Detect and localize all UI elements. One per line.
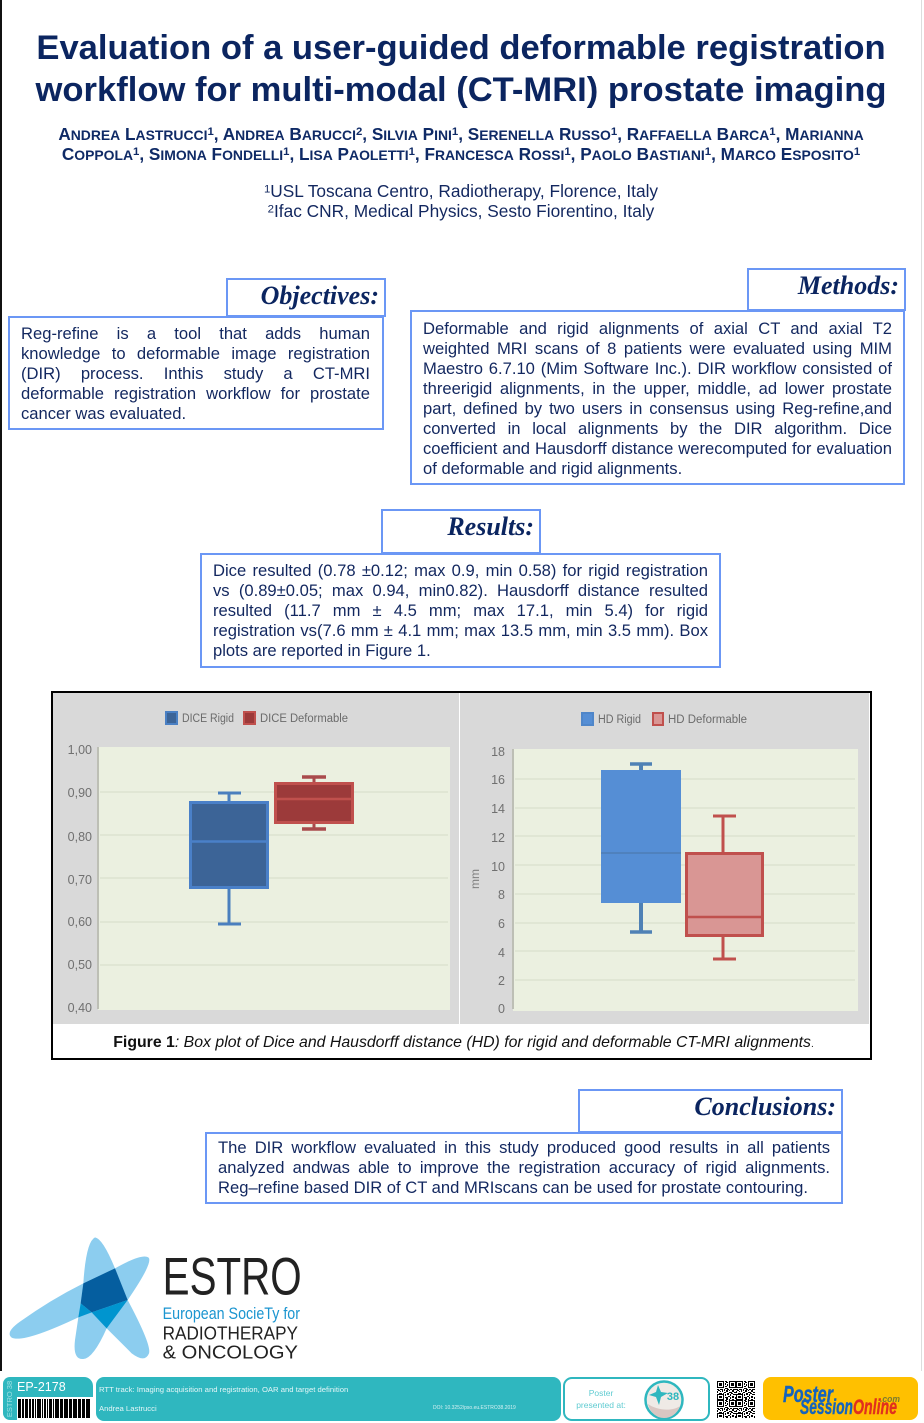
- objectives heading: [226, 278, 386, 317]
- objectives body text: deformable registration workflow for prostate: [21, 384, 370, 403]
- methods heading: Methods:: [798, 271, 899, 300]
- title: Evaluation of a user-guided deformable registration: [36, 29, 886, 67]
- chart: dice box plot: 0,90: [68, 786, 92, 800]
- chart: hausdorff box plot: 0: [498, 1002, 505, 1016]
- affiliations: [264, 181, 658, 221]
- results heading: [381, 509, 541, 554]
- affiliations: 2Ifac CNR, Medical Physics, Sesto Fiorentino, Italy: [268, 201, 654, 221]
- icon: estro 38 badge: [644, 1380, 684, 1419]
- authors: [58, 124, 864, 164]
- poster session online logo: [763, 1377, 918, 1420]
- legend: hd: HD Deformable: [668, 714, 747, 726]
- box: dice rigid: [190, 793, 268, 924]
- box: hd deformable: [686, 816, 762, 959]
- poster session online logo: Poster: [783, 1381, 834, 1407]
- presented at text: Poster: [589, 1388, 613, 1398]
- doi: DOI: 10.3252/pso.eu.ESTRO38.2019: [433, 1405, 516, 1411]
- objectives body text: knowledge to deformable image registration: [21, 344, 370, 363]
- conclusions body text: Reg–refine based DIR of CT and MRIscans can be used for prostate contouring.: [218, 1178, 808, 1197]
- footer: poster id tag: [3, 1377, 93, 1420]
- chart: hausdorff box plot: [460, 693, 869, 1024]
- box: dice deformable: [276, 777, 352, 829]
- chart: hausdorff box plot: 8: [498, 888, 505, 902]
- legend: dice: [166, 712, 348, 725]
- footer: track bar: [96, 1377, 561, 1421]
- methods body text: part, defined by two users in consensus using Reg-refine,and: [423, 399, 892, 418]
- panel: methods: [410, 268, 906, 485]
- logo wordmark: & ONCOLOGY: [163, 1341, 299, 1362]
- barcode: [17, 1397, 93, 1420]
- legend: hd: [582, 713, 747, 726]
- chart: hausdorff box plot: 16: [491, 773, 505, 787]
- chart: hausdorff box plot: 18: [491, 745, 505, 759]
- presented at text: presented at:: [576, 1400, 626, 1410]
- logo wordmark: [163, 1247, 302, 1362]
- logo: estro: [10, 1237, 302, 1362]
- conclusions body text: analyzed andwas able to improve the registration accuracy of rigid alignments.: [218, 1158, 830, 1177]
- figure caption: Figure 1: Box plot of Dice and Hausdorff distance (HD) for rigid and deformable CT-MRI alignments.: [113, 1034, 814, 1051]
- logo wordmark: RADIOTHERAPY: [163, 1323, 299, 1344]
- chart: dice box plot: 1,00: [68, 743, 92, 757]
- figure charts: [53, 693, 869, 1024]
- title: [35, 29, 886, 109]
- poster session online logo: .com: [880, 1394, 900, 1404]
- methods body text: of deformable and rigid alignments.: [423, 459, 682, 478]
- methods body text: threerigid alignments, in the upper, middle, ad lower prostate: [423, 379, 892, 398]
- results body text: vs (0.89±0.05; max 0.94, min0.82). Hausdorff distance resulted: [213, 581, 708, 600]
- results heading: Results:: [447, 512, 534, 541]
- results body text: plots are reported in Figure 1.: [213, 641, 431, 660]
- conclusions heading: [578, 1089, 843, 1133]
- chart: dice box plot: 0,40: [68, 1001, 92, 1015]
- poster number: EP-2178: [17, 1380, 66, 1394]
- methods body text: converted in local alignments by the DIR algorithm. Dice: [423, 419, 892, 438]
- presenter name: Andrea Lastrucci: [99, 1404, 157, 1413]
- chart: hausdorff box plot: 12: [491, 831, 505, 845]
- results body text: Dice resulted (0.78 ±0.12; max 0.9, min 0.58) for rigid registration: [213, 561, 708, 580]
- affiliations: 1USL Toscana Centro, Radiotherapy, Florence, Italy: [264, 181, 658, 201]
- results body text: [200, 553, 721, 668]
- panel: figure 1: [51, 691, 872, 1060]
- legend: hd: HD Rigid: [598, 714, 641, 726]
- panel: conclusions: [205, 1089, 843, 1204]
- chart: dice box plot: 0,80: [68, 830, 92, 844]
- track text: RTT track: Imaging acquisition and registration, OAR and target definition: [99, 1385, 348, 1394]
- poster session online logo: Session: [800, 1396, 853, 1419]
- axis label: mm: mm: [468, 869, 482, 889]
- methods body text: Maestro 6.7.10 (Mim Software Inc.). DIR workflow consisted of: [423, 359, 892, 378]
- legend: dice: DICE Deformable: [260, 713, 348, 725]
- chart: hausdorff box plot: 6: [498, 917, 505, 931]
- methods heading: [747, 268, 906, 311]
- qr code: [717, 1381, 755, 1418]
- results body text: resulted (11.7 mm ± 4.5 mm; max 17.1, min 5.4) for rigid: [213, 601, 708, 620]
- authors: ANDREA LASTRUCCI1, ANDREA BARUCCI2, SILVIA PINI1, SERENELLA RUSSO1, RAFFAELLA BARCA1, MARIANNA: [58, 124, 864, 144]
- methods body text: weighted MRI scans of 8 patients were evaluated using MIM: [423, 339, 892, 358]
- chart: hausdorff box plot: 14: [491, 802, 505, 816]
- chart: hausdorff box plot: 4: [498, 946, 505, 960]
- panel: results: [200, 509, 721, 668]
- methods body text: Deformable and rigid alignments of axial CT and axial T2: [423, 319, 892, 338]
- title: workflow for multi-modal (CT-MRI) prostate imaging: [36, 71, 886, 109]
- icon: estro 38 badge: 38: [667, 1391, 679, 1403]
- objectives body text: (DIR) process. Inthis study a CT-MRI: [21, 364, 370, 383]
- objectives body text: [8, 316, 384, 430]
- box: hd rigid: [601, 764, 681, 932]
- authors: COPPOLA1, SIMONA FONDELLI1, LISA PAOLETTI1, FRANCESCA ROSSI1, PAOLO BASTIANI1, MARCO ESPOSITO1: [62, 144, 860, 164]
- objectives body text: cancer was evaluated.: [21, 404, 186, 423]
- legend: dice: DICE Rigid: [182, 713, 234, 725]
- conclusions body text: The DIR workflow evaluated in this study produced good results in all patients: [218, 1138, 830, 1157]
- chart: dice box plot: [53, 693, 459, 1024]
- objectives heading: Objectives:: [261, 281, 379, 310]
- chart: dice box plot: 0,50: [68, 958, 92, 972]
- conclusions heading: Conclusions:: [694, 1092, 836, 1121]
- panel: objectives: [8, 278, 386, 430]
- logo wordmark: European SocieTy for: [163, 1305, 300, 1323]
- methods body text: coefficient and Hausdorff distance werecomputed for evaluation: [423, 439, 892, 458]
- presented at text: [576, 1388, 626, 1410]
- conclusions body text: [205, 1132, 843, 1204]
- chart: dice box plot: 0,60: [68, 915, 92, 929]
- poster session online logo: Online: [853, 1396, 897, 1419]
- results body text: registration vs(7.6 mm ± 4.1 mm; max 13.5 mm, min 3.5 mm). Box: [213, 621, 708, 640]
- objectives body text: Reg-refine is a tool that adds human: [21, 324, 370, 343]
- vertical conference label: ESTRO 38: [5, 1381, 14, 1417]
- chart: hausdorff box plot: 2: [498, 974, 505, 988]
- footer: presented at badge: [563, 1377, 710, 1421]
- chart: hausdorff box plot: 10: [491, 860, 505, 874]
- chart: dice box plot: 0,70: [68, 873, 92, 887]
- methods body text: [410, 310, 905, 485]
- icon: estro star: [10, 1237, 149, 1359]
